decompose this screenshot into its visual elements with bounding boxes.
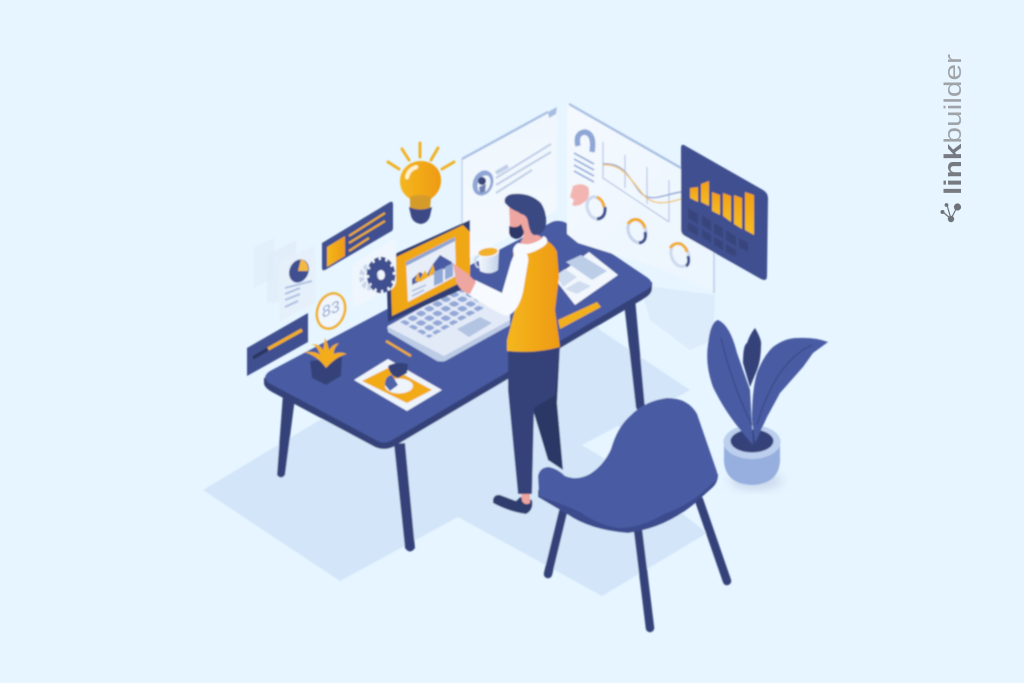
logo: linkbuilder wordmark: linkbuilder xyxy=(940,54,967,195)
laptop xyxy=(386,220,510,362)
donut chart 2 xyxy=(625,217,649,245)
desk leg: front xyxy=(394,443,415,552)
progress card xyxy=(247,313,308,376)
document with pie chart xyxy=(279,245,316,322)
pencil xyxy=(386,341,411,356)
orange bars xyxy=(690,181,754,235)
arm xyxy=(468,250,528,316)
laptop screen xyxy=(386,220,470,322)
avatar arc xyxy=(577,132,593,152)
desk xyxy=(264,221,652,449)
mug xyxy=(475,246,499,273)
bulb rays xyxy=(388,143,454,169)
man xyxy=(453,194,563,514)
middle leaf xyxy=(743,328,761,387)
shoe xyxy=(493,495,532,514)
pot shadow xyxy=(730,473,782,489)
donut chart 1 xyxy=(584,194,608,222)
desk rear legs xyxy=(277,298,645,478)
gear icon: blue front gear xyxy=(369,259,393,291)
hair xyxy=(505,194,546,235)
neck and face xyxy=(509,205,543,244)
desk edge xyxy=(264,282,652,449)
line chart xyxy=(603,142,681,222)
beard xyxy=(509,224,524,239)
floor shadow: light gap xyxy=(582,426,640,462)
pie chart xyxy=(285,256,313,286)
panel shadow on floor xyxy=(640,285,715,350)
desk leg: left xyxy=(277,394,295,478)
text lines xyxy=(496,144,551,193)
bar chart panel xyxy=(681,145,768,280)
collar xyxy=(513,236,547,254)
front leg xyxy=(508,345,560,494)
pot rim xyxy=(724,425,780,459)
gear icon: grey back gear xyxy=(362,267,376,287)
bulb base xyxy=(409,207,432,224)
pot soil xyxy=(730,430,774,452)
ankle xyxy=(521,493,530,504)
chair shell underside xyxy=(538,470,718,533)
score circle 83 xyxy=(312,289,350,333)
chair shell xyxy=(538,398,717,528)
right panel xyxy=(567,104,716,293)
bulb glass xyxy=(400,161,441,199)
laptop display xyxy=(406,237,456,302)
ruler xyxy=(558,302,601,329)
desk plant xyxy=(304,338,347,385)
floor shadow xyxy=(203,300,707,596)
text lines xyxy=(574,153,594,182)
gear card xyxy=(352,240,396,307)
avatar xyxy=(469,167,497,199)
icon: logo network nodes xyxy=(941,204,960,222)
ghost pages xyxy=(254,238,296,303)
chair legs xyxy=(548,500,727,628)
potted plant xyxy=(707,320,828,489)
chair xyxy=(538,398,727,628)
pink blob xyxy=(570,184,589,206)
left panel xyxy=(462,107,557,258)
score circle 83: 83 xyxy=(322,296,340,322)
paper on desk xyxy=(554,252,618,305)
dark table cells xyxy=(688,208,748,257)
panel top edge xyxy=(569,104,681,168)
vest xyxy=(507,239,560,352)
trackpad xyxy=(457,317,492,337)
pot body xyxy=(724,442,780,485)
right leaf xyxy=(752,338,828,443)
desk top xyxy=(265,221,652,442)
left leaf xyxy=(707,320,753,445)
back leg xyxy=(530,345,563,470)
laptop base xyxy=(387,281,510,361)
tablet with pie chart xyxy=(354,359,442,411)
orange bars card xyxy=(322,202,393,270)
keyboard xyxy=(400,288,486,338)
illustration xyxy=(203,104,828,628)
desk leg: right xyxy=(624,298,645,411)
lightbulb xyxy=(388,143,454,224)
panel top edge xyxy=(462,112,548,159)
hand xyxy=(453,263,476,294)
donut chart 3 xyxy=(668,241,692,269)
